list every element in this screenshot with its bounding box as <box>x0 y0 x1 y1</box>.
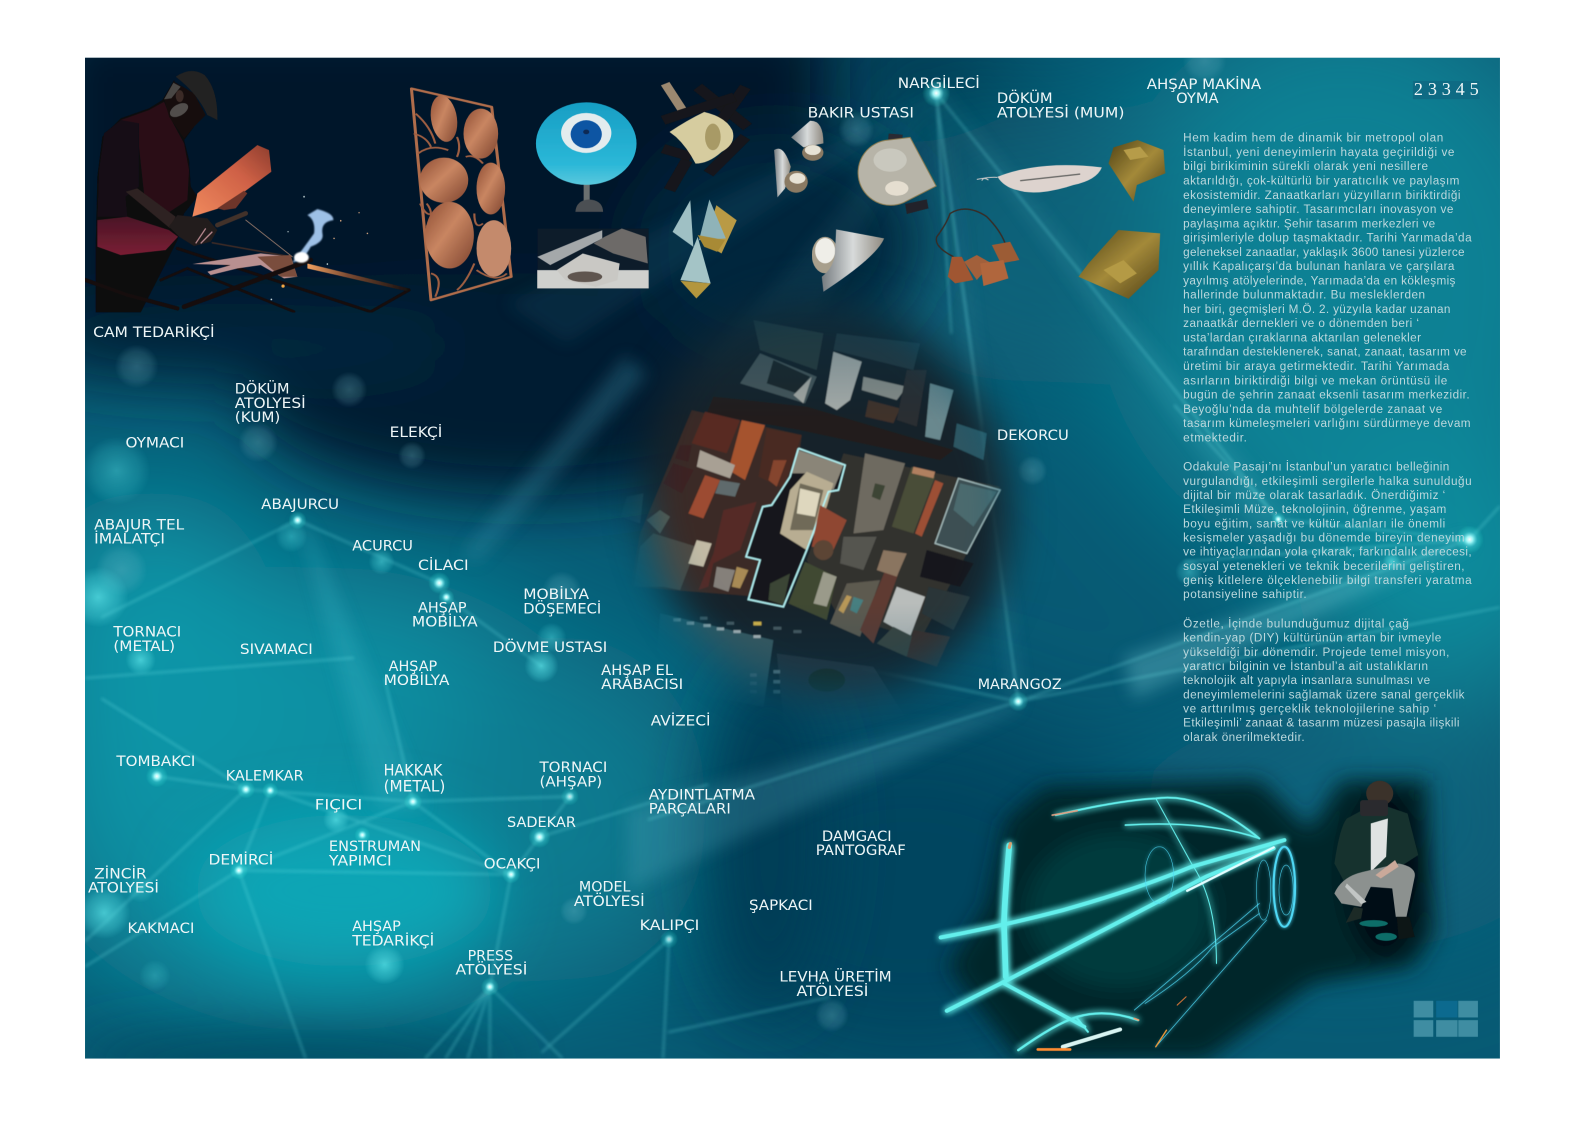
welder: sleeve <box>97 120 139 217</box>
car: glowing body lines <box>941 798 1284 1050</box>
label: model atolyesi <box>574 880 645 910</box>
aerial: top and bottom teal fades <box>704 300 952 694</box>
label: enstruman yapimci: YAPIMCI <box>328 853 392 869</box>
text block: paragraph 1: tarafından desteklenerek, sanat, zanaat, tasarım ve <box>1183 346 1467 359</box>
label: damgaci pantograf: PANTOGRAF <box>816 843 906 859</box>
text block: paragraph 1: deneyimlere sahiptir. Tasarımcıları inovasyon ve <box>1183 203 1453 216</box>
label: ficici: FIÇICI <box>315 798 362 814</box>
label: hakkak metal: (METAL) <box>384 776 445 795</box>
label: abajur tel imalatci: İMALATÇI <box>94 529 165 547</box>
label: acurcu: ACURCU <box>352 539 413 555</box>
label: ahsap el arabacisi: ARABACISI <box>601 677 683 693</box>
label: enstruman yapimci: ENSTRUMAN <box>329 839 421 855</box>
label: kalipci: KALIPÇI <box>640 918 699 934</box>
label: nargileci: NARGİLECİ <box>898 74 980 92</box>
label: ahsap tedarikci: TEDARİKÇİ <box>351 931 434 949</box>
label: hakkak metal: HAKKAK <box>384 760 443 779</box>
text block: paragraph 2: Etkileşimli Müze, teknolojinin, öğrenme, yaşam <box>1183 503 1446 516</box>
background colour fields <box>85 58 1500 1059</box>
label: hakkak metal <box>384 760 445 795</box>
text block: paragraph 1: İstanbul, yeni deneyimlerin hayata geçirildiği ve <box>1183 146 1454 159</box>
objects: cone candle <box>812 229 884 292</box>
label: dokum atolyesi kum: DÖKÜM <box>235 380 289 398</box>
label: abajur tel imalatci <box>94 517 184 547</box>
objects: silver half disc <box>858 133 936 214</box>
label: ahsap tedarikci: AHŞAP <box>352 919 401 935</box>
label: model atolyesi: ATÖLYESİ <box>574 892 645 910</box>
label: ahsap mobilya 1 <box>412 600 478 630</box>
label: elekci: ELEKÇİ <box>390 423 442 441</box>
label: ahsap mobilya 2: MOBİLYA <box>384 671 450 689</box>
label: bakir ustasi: BAKIR USTASI <box>808 105 914 121</box>
label: press atolyesi: ATÖLYESİ <box>455 961 527 979</box>
label: tornaci ahsap: (AHŞAP) <box>539 774 602 790</box>
aerial site photograph <box>625 298 1033 714</box>
label: sadekar: SADEKAR <box>507 815 576 831</box>
label: tornaci ahsap: TORNACI <box>538 760 607 776</box>
glowing network nodes <box>68 38 1484 1032</box>
copper lattice panel <box>411 89 511 300</box>
label: ahsap makina oyma: AHŞAP MAKİNA <box>1147 75 1261 93</box>
aerial: neighbouring blocks <box>788 453 1000 667</box>
welder: forearm <box>126 188 176 228</box>
objects: silver candle holders <box>774 121 823 197</box>
label: dekorcu: DEKORCU <box>997 428 1069 444</box>
aerial: tree <box>808 668 845 692</box>
label: dokum atolyesi mum: DÖKÜM <box>997 89 1053 107</box>
aerial: street and square ground <box>639 397 1000 697</box>
label: dokum atolyesi kum: ATOLYESİ <box>235 394 306 412</box>
car and VR visitor image <box>941 780 1434 1060</box>
text block: paragraph 1: Hem kadim hem de dinamik bir metropol olan <box>1183 132 1443 145</box>
wide light rays <box>298 93 1470 891</box>
text block: paragraph 3: olarak önerilmektedir. <box>1183 731 1305 744</box>
label: marangoz: MARANGOZ <box>978 677 1062 693</box>
label: aydinlatma parcalari: PARÇALARI <box>649 802 731 818</box>
label: press atolyesi: PRESS <box>468 948 513 964</box>
text block: paragraph 2: boyu eğitim, sanat ve kültür alanları ile önemli <box>1183 517 1445 530</box>
welding hot metal <box>184 253 311 307</box>
welder: head and cap <box>164 71 217 138</box>
text block: paragraph 3: yaratıcı bilginin ve İstanbul’a ait ustalıkların <box>1183 660 1428 673</box>
gold form in black sticks <box>663 84 748 190</box>
label: kakmaci: KAKMACI <box>128 921 194 937</box>
label: abajurcu: ABAJURCU <box>261 497 339 513</box>
text block: paragraph 3: Etkileşimli’ zanaat & tasarım müzesi pasajla ilişkili <box>1183 717 1459 730</box>
text block: paragraph 2: Odakule Pasajı’nı İstanbul’un yaratıcı belleğinin <box>1183 461 1449 474</box>
car: headlight stripe <box>1187 847 1274 891</box>
aerial: Odakule site <box>746 448 845 607</box>
text block: paragraph 1: Beyoğlu’nda da muhtelif bölgelerde zanaat ve <box>1183 403 1442 416</box>
welding flame and sparks <box>271 196 368 300</box>
text block: paragraph 1: bugün de şehrin zanaat eksenli tasarım merkezidir. <box>1183 389 1470 402</box>
text block: paragraph 1: hallerinde bulunmaktadır. Bu mesleklerden <box>1183 289 1425 302</box>
welder: brick block <box>192 145 271 217</box>
text block: paragraph 2: sosyal yetenekleri ve teknik becerilerini geliştiren, <box>1183 560 1465 573</box>
text block: paragraph 1: bilgi birikiminin sürekli olarak yeni nesillere <box>1183 160 1428 173</box>
text block: paragraph 1: asırların biriktirdiği bilgi ve mekan örüntüsü ile <box>1183 374 1447 387</box>
text block: paragraph 2 <box>1183 461 1472 601</box>
text block: paragraph 2: kesişmeler yaşadığı bu dönemde bireyin deneyim <box>1183 531 1465 544</box>
logo squares <box>1414 1001 1478 1037</box>
label: model atolyesi: MODEL <box>579 880 631 896</box>
text block: paragraph 1: yayılmış atölyelerinde, Yarımada’da en kökleşmiş <box>1183 274 1456 287</box>
text block: paragraph 1: paylaşıma açıktır. Şehir tasarım merkezleri ve <box>1183 217 1435 230</box>
label: oymaci: OYMACI <box>126 435 184 451</box>
welder: body silhouette <box>96 80 197 312</box>
label: cilaci: CİLACI <box>418 556 469 574</box>
label: zincir atolyesi: ZİNCİR <box>94 864 147 882</box>
label: dokum atolyesi mum: ATOLYESİ (MUM) <box>997 103 1124 121</box>
label: aydinlatma parcalari <box>649 788 755 818</box>
text block: paragraph 1: yıllık Kapalıçarşı’da bulunan hanlara ve çarşılara <box>1183 260 1455 273</box>
label: ahsap mobilya 2 <box>384 659 450 689</box>
text block: paragraph 2: ve ihtiyaçlarından yola çıkarak, farkındalık derecesi, <box>1183 546 1472 559</box>
network line rays <box>85 93 1500 1059</box>
text block: paragraph 3: Özetle, İçinde bulunduğumuz dijital çağ <box>1183 617 1409 630</box>
craft network labels <box>88 74 1261 1000</box>
car: dark vignette <box>949 780 1434 1060</box>
welder: vest lower <box>97 217 178 255</box>
label: enstruman yapimci <box>328 839 421 869</box>
text block: paragraph 3: teknolojik alt yapıyla insanlara sunulması ve <box>1183 674 1430 687</box>
label: ahsap mobilya 1: MOBİLYA <box>412 612 478 630</box>
label: abajur tel imalatci: ABAJUR TEL <box>94 517 184 533</box>
text block: paragraph 3: ve arttırılmış gerçeklik teknolojilerine sahip ‘ <box>1183 703 1436 716</box>
welding rod frame <box>86 213 409 312</box>
label: ahsap el arabacisi: AHŞAP EL <box>601 663 673 679</box>
text block: paragraph 1 <box>1183 132 1472 444</box>
text block: paragraph 2: potansiyeline sahiptir. <box>1183 588 1307 601</box>
text block: paragraph 1: her biri, geçmişleri M.Ö. 2. yüzyıla kadar uzanan <box>1183 303 1450 316</box>
label: ahsap makina oyma: OYMA <box>1176 91 1219 107</box>
label: aydinlatma parcalari: AYDINTLATMA <box>649 788 755 804</box>
welder: hands <box>169 191 247 246</box>
aerial: surrounding roofs <box>620 320 987 592</box>
label: zincir atolyesi: ATOLYESİ <box>88 879 159 897</box>
label: mobilya dosemeci <box>523 585 601 617</box>
label: ahsap mobilya 1: AHŞAP <box>418 600 467 616</box>
text block: paragraph 1: zanaatkâr dernekleri ve o dönemden beri ‘ <box>1183 317 1419 330</box>
text block: paragraph 1: tasarım kümeleşmeleri varlığını sürdürmeye devam <box>1183 417 1471 430</box>
label: demirci: DEMİRCİ <box>208 850 273 868</box>
label: dokum atolyesi kum: (KUM) <box>235 410 280 426</box>
text block: paragraph 3: deneyimlemelerini sağlamak üzere sanal gerçeklik <box>1183 688 1465 701</box>
label: ahsap tedarikci <box>351 919 434 949</box>
label: levha uretim atolyesi: ATÖLYESİ <box>797 982 868 1000</box>
label: tornaci ahsap <box>538 760 607 790</box>
label: zincir atolyesi <box>88 864 159 897</box>
label: sapkaci: ŞAPKACI <box>749 898 813 914</box>
text block: paragraph 1: geleneksel zanaatlar, yaklaşık 3600 tanesi yüzlerce <box>1183 246 1465 259</box>
label: cam tedarikci: CAM TEDARİKÇİ <box>93 323 215 341</box>
label: dokum atolyesi kum <box>235 380 306 426</box>
welder photograph <box>86 71 409 312</box>
label: levha uretim atolyesi: LEVHA ÜRETİM <box>779 968 892 986</box>
label: ahsap mobilya 2: AHŞAP <box>389 659 438 675</box>
label: tornaci metal: (METAL) <box>113 639 175 655</box>
label: ahsap makina oyma <box>1147 75 1261 107</box>
objects: gold leaves <box>1078 140 1165 299</box>
welder: maroon vest <box>121 102 189 213</box>
label: tornaci metal: TORNACI <box>112 625 181 641</box>
label: damgaci pantograf: DAMGACI <box>822 829 892 845</box>
label: press atolyesi <box>455 948 527 979</box>
silver pliers photo <box>537 228 649 288</box>
label: dokum atolyesi mum <box>997 89 1124 121</box>
label: avizeci: AVİZECİ <box>651 712 711 730</box>
patina gold cones <box>673 199 737 298</box>
project number: 23345 <box>1414 79 1479 99</box>
label: tombakci: TOMBAKCI <box>115 754 195 770</box>
crafted objects right of centre <box>774 121 1165 299</box>
panel: main poster background <box>85 58 1500 1059</box>
text block: paragraph 1: ekosistemidir. Zanaatkarları yüzyılların biriktirdiği <box>1183 189 1460 202</box>
car: warm accents <box>1009 811 1186 1049</box>
text block: paragraph 2: vurgulandığı, etkileşimli sergilerle halka sunulduğu <box>1183 475 1472 488</box>
objects: copper necklace <box>936 209 1019 286</box>
text block: paragraph 1: etmektedir. <box>1183 431 1247 444</box>
text block: paragraph 1: üretimi bir araya getirmektedir. Tarihi Yarımada <box>1183 360 1450 373</box>
text block: paragraph 3: kendin-yap (DIY) kültürünün artan bir ivmeyle <box>1183 632 1441 645</box>
text block: paragraph 3: yükseldiği bir dönemdir. Projede temel misyon, <box>1183 646 1449 659</box>
label: levha uretim atolyesi <box>779 968 892 1000</box>
label: mobilya dosemeci: DÖŞEMECİ <box>523 599 601 617</box>
text block: paragraph 3 <box>1183 617 1465 744</box>
label: dovme ustasi: DÖVME USTASI <box>493 638 607 656</box>
label: ahsap el arabacisi <box>601 663 683 693</box>
label: ocakci: OCAKÇI <box>484 856 540 872</box>
objects: wax pendant <box>977 165 1102 192</box>
label: kalemkar: KALEMKAR <box>226 768 304 784</box>
aerial: parked cars <box>673 617 801 693</box>
text block: paragraph 1: girişimleriyle dolup taşmaktadır. Tarihi Yarımada’da <box>1183 232 1472 245</box>
VR visitor figure <box>1334 781 1418 941</box>
label: damgaci pantograf <box>816 829 906 859</box>
blue evil eye <box>536 102 637 212</box>
text block: paragraph 2: geniş kitlelere ölçeklenebilir bilgi transferi yaratma <box>1183 574 1472 587</box>
text block: paragraph 1: usta’lardan çıraklarına aktarılan gelenekler <box>1183 331 1421 344</box>
label: sivamaci: SIVAMACI <box>240 642 313 658</box>
label: tornaci metal <box>112 625 181 655</box>
text block: paragraph 1: aktarıldığı, çok-kültürlü bir yaratıcılık ve paylaşım <box>1183 175 1459 188</box>
label: mobilya dosemeci: MOBİLYA <box>523 585 589 603</box>
car: thin blue lines and wheels <box>1134 847 1295 1047</box>
text block: paragraph 2: dijital bir müze olarak tasarladık. Önerdiğimiz ‘ <box>1183 489 1445 502</box>
